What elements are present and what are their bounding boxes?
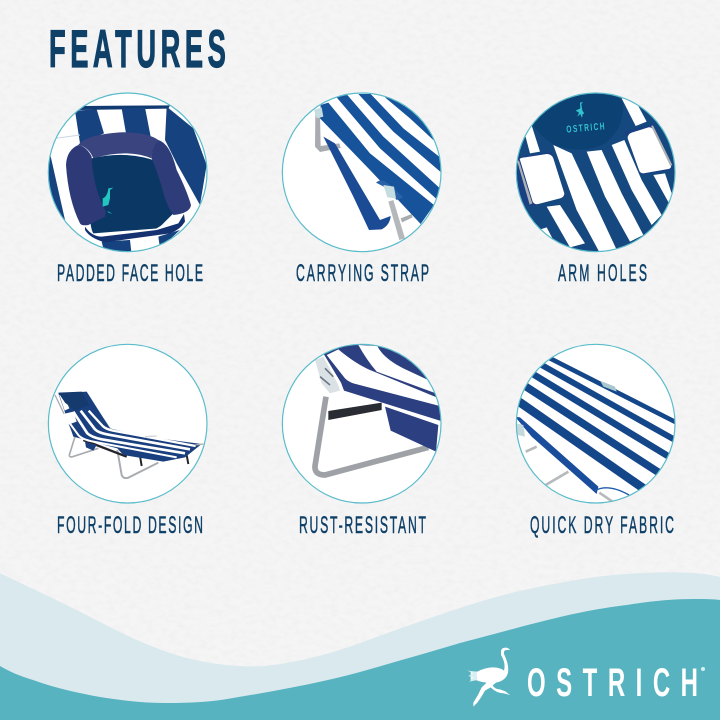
registered mark — [701, 667, 705, 671]
photo: rust-resistant — [280, 340, 443, 507]
photo: arm holes — [515, 90, 678, 257]
panel: carrying strap — [280, 90, 443, 287]
photo: four-fold design — [43, 340, 213, 507]
icon: small ostrich mark — [576, 102, 584, 118]
label: QUICK DRY FABRIC — [530, 511, 674, 539]
logo: Ostrich — [467, 648, 705, 707]
icon: ostrich — [467, 648, 510, 707]
teal wave — [0, 599, 720, 720]
photo: carrying strap — [280, 90, 443, 257]
pillow logo text: OSTRICH — [566, 120, 605, 135]
panel: quick dry fabric — [515, 340, 678, 539]
panel: four-fold design — [48, 344, 208, 534]
panel: padded face hole — [43, 90, 213, 287]
label: ARM HOLES — [558, 259, 647, 287]
label: PADDED FACE HOLE — [57, 259, 203, 287]
wordmark: OSTRICH — [527, 660, 698, 704]
panel: rust-resistant — [280, 340, 443, 539]
light wave — [0, 572, 720, 720]
title: FEATURES — [49, 19, 226, 78]
panel: arm holes — [515, 90, 678, 287]
photo: padded face hole — [43, 90, 213, 257]
photo: quick dry fabric — [515, 340, 678, 507]
label: CARRYING STRAP — [296, 259, 429, 287]
label: RUST-RESISTANT — [299, 511, 426, 539]
label: FOUR-FOLD DESIGN — [57, 511, 203, 539]
